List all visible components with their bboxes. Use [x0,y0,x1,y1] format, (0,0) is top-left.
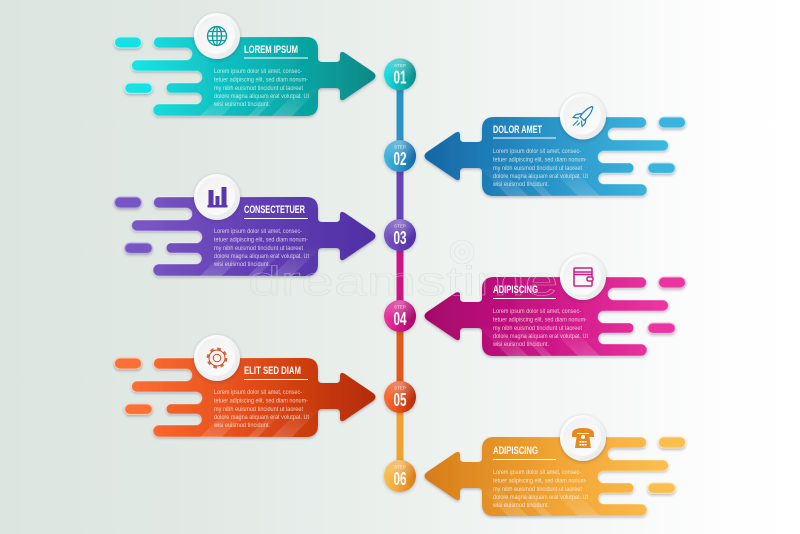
panel: step 4 adipiscing [424,254,686,356]
text block: my nibh euismod tincidunt ut laoreet [214,407,303,413]
watermark: dreamstime [248,258,558,304]
underline [493,138,556,139]
underline [244,379,308,380]
step badge 04 [384,300,416,332]
panel: step 2 dolor amet [424,94,686,196]
text block: Lorem ipsum dolor sit amet, consec- [214,390,302,396]
text block: my nibh euismod tincidunt ut laoreet [214,86,303,92]
text block: dolore magna aliquam erat volutpat. Ut [493,174,588,180]
text block: Lorem ipsum dolor sit amet, consec- [493,470,581,476]
icon: wallet [560,254,606,300]
panel: step 5 elit sed diam [114,335,376,437]
text block: tetuer adipiscing elit, sed diam nonum- [493,318,587,324]
text block: my nibh euismod tincidunt ut laoreet [214,246,303,252]
text block: Lorem ipsum dolor sit amet, consec- [214,229,302,235]
text block: wisi euismod tincidunt. [213,423,270,429]
heading: LOREM IPSUM [244,44,298,56]
text block: wisi euismod tincidunt. [492,342,549,348]
text block: Lorem ipsum dolor sit amet, consec- [214,69,302,75]
watermark [248,240,558,304]
step badge 04: STEP [394,304,406,310]
text block [213,390,309,429]
text block: tetuer adipiscing elit, sed diam nonum- [214,78,308,84]
icon: bar chart [194,174,240,220]
shape: purple arrow panel [114,197,376,276]
text block: dolore magna aliquam erat volutpat. Ut [214,94,309,100]
icon: gear [194,335,240,381]
underline [244,58,308,59]
shape: amber arrow panel [424,437,686,516]
step badge 03 [384,219,416,251]
text block: wisi euismod tincidunt. [492,182,549,188]
text block: my nibh euismod tincidunt ut laoreet [493,166,582,172]
step badge 01: 01 [394,68,406,88]
timeline connector [396,85,404,465]
step badge 02: 02 [394,149,406,169]
text block: wisi euismod tincidunt. [213,262,270,268]
heading: DOLOR AMET [493,124,542,136]
step badge 05: STEP [394,386,406,390]
shape: magenta arrow panel [424,277,686,356]
step badge 02 [384,140,416,172]
underline [493,298,556,299]
text block [213,69,309,108]
text block: tetuer adipiscing elit, sed diam nonum- [493,158,587,164]
text block [492,470,588,509]
underline [493,459,556,460]
step badge 05: 05 [394,390,406,410]
step badge 06: STEP [394,464,406,470]
step badge 01 [384,58,416,90]
text block: dolore magna aliquam erat volutpat. Ut [493,334,588,340]
text block [213,229,309,268]
shape: orange arrow panel [114,358,376,437]
step badge 04: 04 [394,309,406,329]
heading: ADIPISCING [493,284,538,296]
text block: wisi euismod tincidunt. [492,503,549,509]
text block: Lorem ipsum dolor sit amet, consec- [493,309,581,315]
text block: wisi euismod tincidunt. [213,102,270,108]
text block: tetuer adipiscing elit, sed diam nonum- [214,238,308,244]
icon: telephone [560,415,606,461]
step badge 06 [384,460,416,492]
icon: globe [194,13,240,59]
heading: ADIPISCING [493,445,538,457]
text block: dolore magna aliquam erat volutpat. Ut [214,254,309,260]
text block: Lorem ipsum dolor sit amet, consec- [493,149,581,155]
panel: step 1 lorem ipsum [114,13,376,116]
text block: dolore magna aliquam erat volutpat. Ut [493,495,588,501]
step badge 01: STEP [394,63,406,68]
text block: my nibh euismod tincidunt ut laoreet [493,326,582,332]
panel: step 3 consectetuer [114,174,376,276]
text block: my nibh euismod tincidunt ut laoreet [493,487,582,493]
underline [244,218,308,219]
step badge 03: STEP [394,224,406,228]
heading: CONSECTETUER [244,204,305,216]
text block [492,149,588,188]
step badge 02: STEP [394,144,406,150]
step badge 06: 06 [394,469,406,489]
heading: ELIT SED DIAM [244,365,301,377]
text block [492,309,588,348]
shape: blue arrow panel [424,117,686,196]
text block: tetuer adipiscing elit, sed diam nonum- [214,398,308,404]
icon: rocket [560,94,606,140]
text block: dolore magna aliquam erat volutpat. Ut [214,415,309,421]
step badge 05 [384,381,416,413]
step badge 03: 03 [394,228,406,248]
panel: step 6 adipiscing [424,415,686,516]
shape: teal arrow panel [114,37,376,116]
text block: tetuer adipiscing elit, sed diam nonum- [493,478,587,484]
